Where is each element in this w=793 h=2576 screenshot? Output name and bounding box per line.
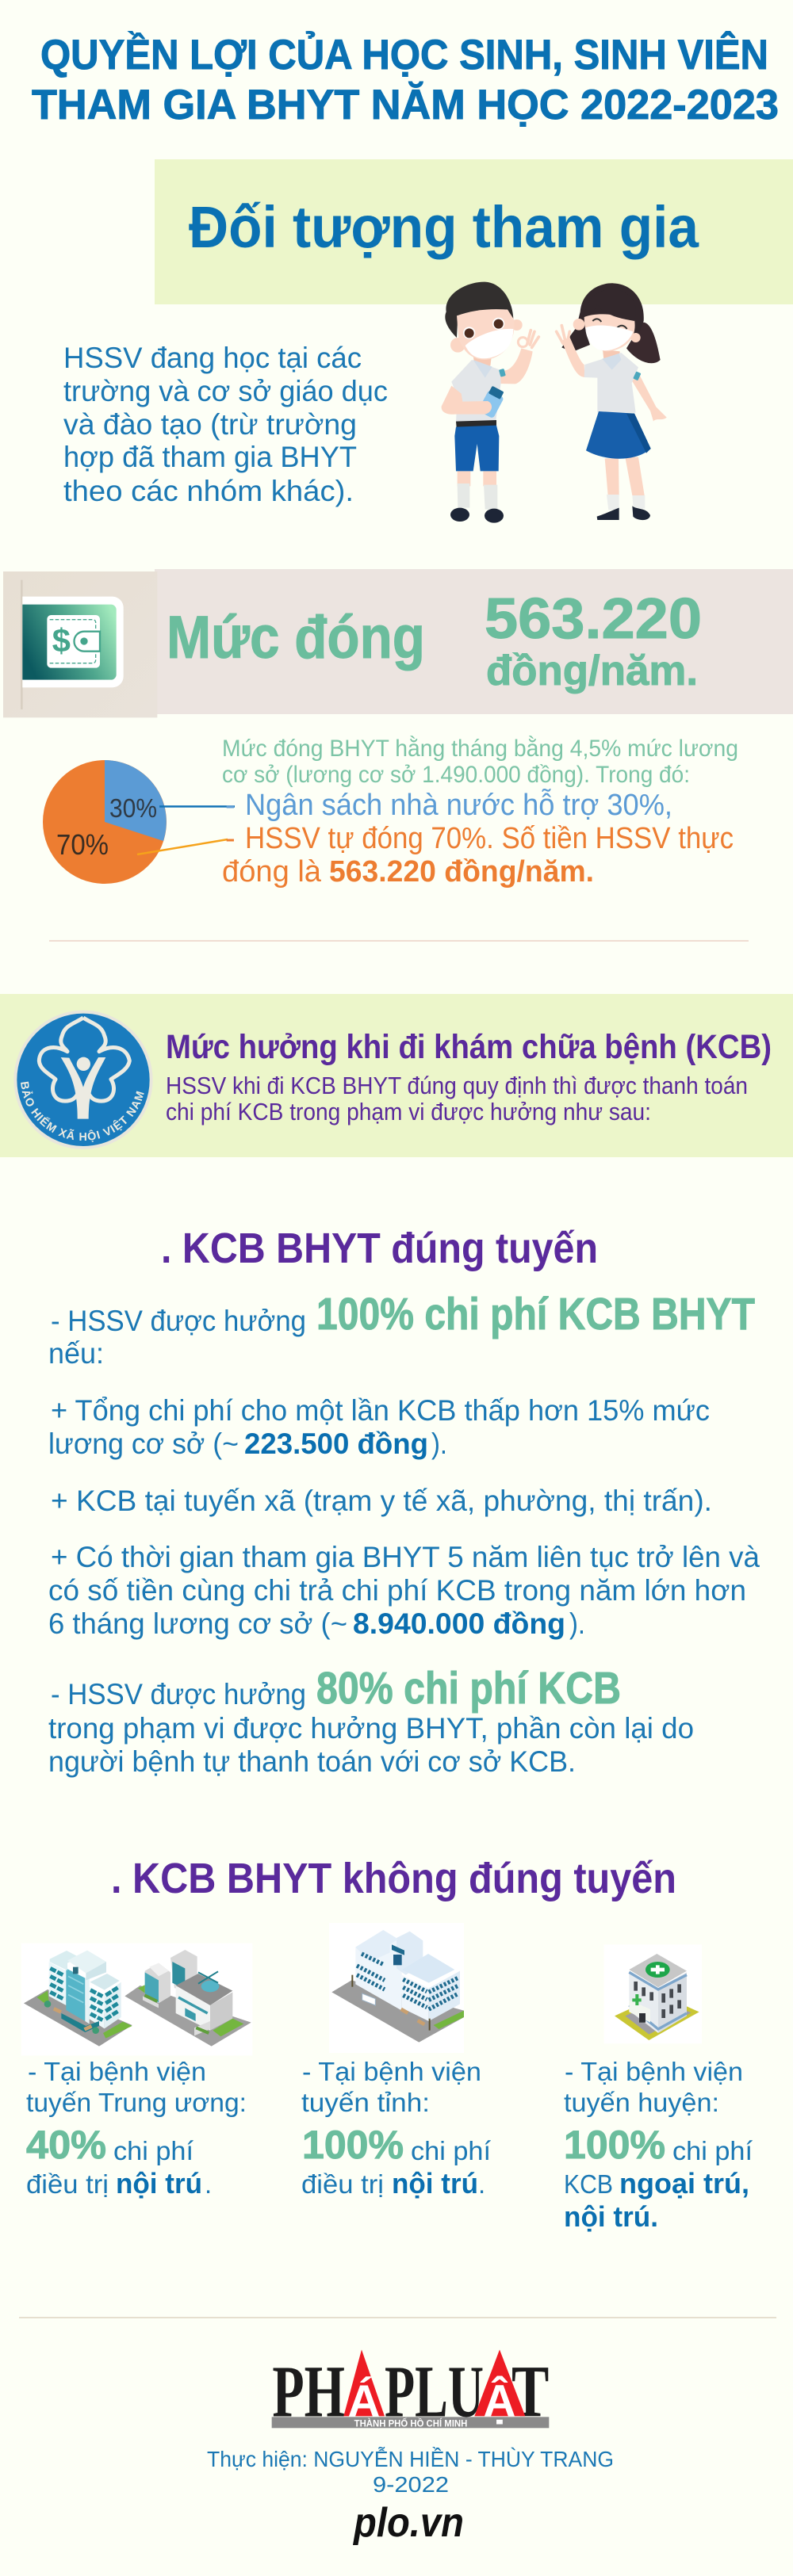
pie chart: 70% xyxy=(56,828,109,861)
heading: kcb không đúng tuyến: . KCB BHYT không đúng tuyến xyxy=(111,1855,676,1902)
logo: pháp luật: Ậ xyxy=(484,2375,515,2426)
text block: central hospital: chi phí xyxy=(113,2136,193,2165)
text block: đúng tuyến conditions: người bệnh tự thanh toán với cơ sở KCB. xyxy=(48,1745,576,1778)
pie chart: 30% xyxy=(109,793,157,823)
logo: pháp luật: T xyxy=(511,2351,549,2433)
text block: mức đóng explanation: Mức đóng BHYT hằng tháng bằng 4,5% mức lương xyxy=(222,736,738,762)
text block: đúng tuyến conditions: + Tổng chi phí cho một lần KCB thấp hơn 15% mức xyxy=(51,1394,710,1427)
icon: students wearing masks xyxy=(442,282,667,523)
text block: provincial hospital: điều trị xyxy=(301,2169,384,2199)
title xyxy=(32,30,779,128)
logo: pháp luật: PH xyxy=(272,2351,345,2433)
text block: district hospital: ngoại trú, xyxy=(619,2167,749,2200)
text block: central hospital: - Tại bệnh viện xyxy=(28,2057,206,2086)
text block: district hospital: chi phí xyxy=(672,2136,753,2165)
text block: đúng tuyến conditions: trong phạm vi được hưởng BHYT, phần còn lại do xyxy=(48,1712,694,1745)
text block: pie legend: 563.220 đồng/năm. xyxy=(329,855,594,889)
text block: central hospital: tuyến Trung ương: xyxy=(26,2088,247,2117)
text block: provincial hospital: nội trú xyxy=(392,2167,478,2200)
text block: đúng tuyến conditions: ). xyxy=(569,1607,585,1640)
panel: mức hưởng xyxy=(0,994,793,1157)
icon: central hospitals xyxy=(21,1943,252,2055)
heading: mức đóng: Mức đóng xyxy=(167,604,425,671)
credits: 9-2022 xyxy=(373,2472,449,2497)
icon: vietnam social security logo xyxy=(14,1010,152,1149)
text block: provincial hospital: tuyến tỉnh: xyxy=(301,2088,430,2117)
logo: pháp luật xyxy=(272,2349,549,2433)
text block: mức hưởng intro: chi phí KCB trong phạm vi được hưởng như sau: xyxy=(166,1098,651,1126)
heading: đối tượng tham gia: Đối tượng tham gia xyxy=(189,194,699,260)
heading: kcb đúng tuyến: . KCB BHYT đúng tuyến xyxy=(161,1225,598,1272)
text block: đúng tuyến conditions: nếu: xyxy=(48,1337,104,1370)
text block: đúng tuyến conditions: 6 tháng lương cơ sở (~ xyxy=(48,1607,347,1640)
boy xyxy=(442,282,538,523)
text block: đối tượng: hợp đã tham gia BHYT xyxy=(63,441,357,473)
amount: 563.220 đồng/năm: đồng/năm. xyxy=(486,648,698,694)
text block: pie legend: Ngân sách nhà nước hỗ trợ 30%, xyxy=(245,788,672,822)
text block: đúng tuyến conditions: ). xyxy=(431,1428,447,1460)
text block: provincial hospital: chi phí xyxy=(411,2136,491,2165)
text block: district hospital: tuyến huyện: xyxy=(564,2088,719,2117)
text block: đối tượng xyxy=(63,342,388,507)
amount: 563.220 đồng/năm xyxy=(485,587,702,694)
icon: provincial hospital xyxy=(329,1923,702,2053)
text block: district hospital xyxy=(564,2057,753,2233)
panel: đối tượng tham gia banner xyxy=(155,159,793,304)
text block: đúng tuyến conditions: 8.940.000 đồng xyxy=(353,1607,565,1640)
text block: đối tượng: theo các nhóm khác). xyxy=(63,475,354,507)
icon: vietnam social security logo: BẢO HIỂM XÃ HỘI VIỆT NAM xyxy=(21,1081,144,1142)
text block: district hospital: KCB xyxy=(564,2169,613,2199)
text block: pie legend xyxy=(222,788,734,889)
text block: pie legend: - xyxy=(225,822,236,855)
text block: pie legend: - xyxy=(225,789,236,822)
logo: pháp luật: THÀNH PHỐ HỒ CHÍ MINH xyxy=(354,2417,467,2429)
icon: wallet: $ xyxy=(52,621,71,659)
icon: wallet xyxy=(3,571,157,717)
text block: provincial hospital: - Tại bệnh viện xyxy=(302,2057,481,2086)
text block: central hospital xyxy=(26,2057,247,2200)
text block: central hospital: 40% xyxy=(26,2123,106,2167)
text block: provincial hospital xyxy=(301,2057,491,2200)
text block: pie legend: đóng là xyxy=(222,855,322,889)
text block: district hospital: nội trú. xyxy=(564,2200,658,2233)
pie chart xyxy=(43,760,235,884)
text block: mức hưởng intro: HSSV khi đi KCB BHYT đúng quy định thì được thanh toán xyxy=(166,1072,748,1099)
text block: đúng tuyến conditions: 223.500 đồng xyxy=(244,1428,428,1460)
credits: Thực hiện: NGUYỄN HIỀN - THÙY TRANG xyxy=(207,2447,614,2471)
panel: mức đóng banner xyxy=(155,569,793,714)
text block: đối tượng: HSSV đang học tại các xyxy=(63,342,362,374)
text block: central hospital: nội trú xyxy=(116,2167,202,2200)
text block: central hospital: . xyxy=(205,2169,212,2199)
amount: 563.220 đồng/năm: 563.220 xyxy=(485,587,702,651)
text block: central hospital: điều trị xyxy=(26,2169,109,2199)
text block: district hospital: - Tại bệnh viện xyxy=(565,2057,743,2086)
text block: đúng tuyến conditions: - HSSV được hưởng xyxy=(51,1678,306,1710)
text block: đúng tuyến conditions: lương cơ sở (~ xyxy=(48,1428,239,1460)
text block: đúng tuyến conditions: - HSSV được hưởng xyxy=(51,1305,306,1337)
text block: district hospital: 100% xyxy=(564,2123,665,2167)
site url: plo.vn xyxy=(352,2500,464,2546)
text block: pie legend: HSSV tự đóng 70%. Số tiền HSSV thực xyxy=(245,822,734,855)
text block: mức đóng explanation xyxy=(222,736,738,788)
text block: đối tượng: trường và cơ sở giáo dục xyxy=(63,375,388,407)
logo: pháp luật: Á xyxy=(348,2375,380,2426)
text block: đối tượng: và đào tạo (trừ trường xyxy=(63,408,357,441)
title: THAM GIA BHYT NĂM HỌC 2022-2023 xyxy=(32,81,779,128)
text block: mức hưởng intro xyxy=(166,1072,748,1126)
logo: pháp luật: PLU xyxy=(385,2351,484,2433)
highlight: 80 percent: 80% chi phí KCB xyxy=(316,1663,621,1714)
text block: đúng tuyến conditions: + Có thời gian tham gia BHYT 5 năm liên tục trở lên và xyxy=(51,1541,760,1573)
credits xyxy=(207,2447,614,2497)
text block: đúng tuyến conditions: có số tiền cùng chi trả chi phí KCB trong năm lớn hơn xyxy=(48,1574,746,1607)
text block: đúng tuyến conditions xyxy=(48,1289,760,1778)
text block: provincial hospital: . xyxy=(478,2169,485,2199)
text block: provincial hospital: 100% xyxy=(302,2123,404,2167)
text block: đúng tuyến conditions: + KCB tại tuyến xã (trạm y tế xã, phường, thị trấn). xyxy=(51,1485,712,1517)
girl xyxy=(557,283,667,520)
text block: mức đóng explanation: cơ sở (lương cơ sở 1.490.000 đồng). Trong đó: xyxy=(222,762,690,788)
